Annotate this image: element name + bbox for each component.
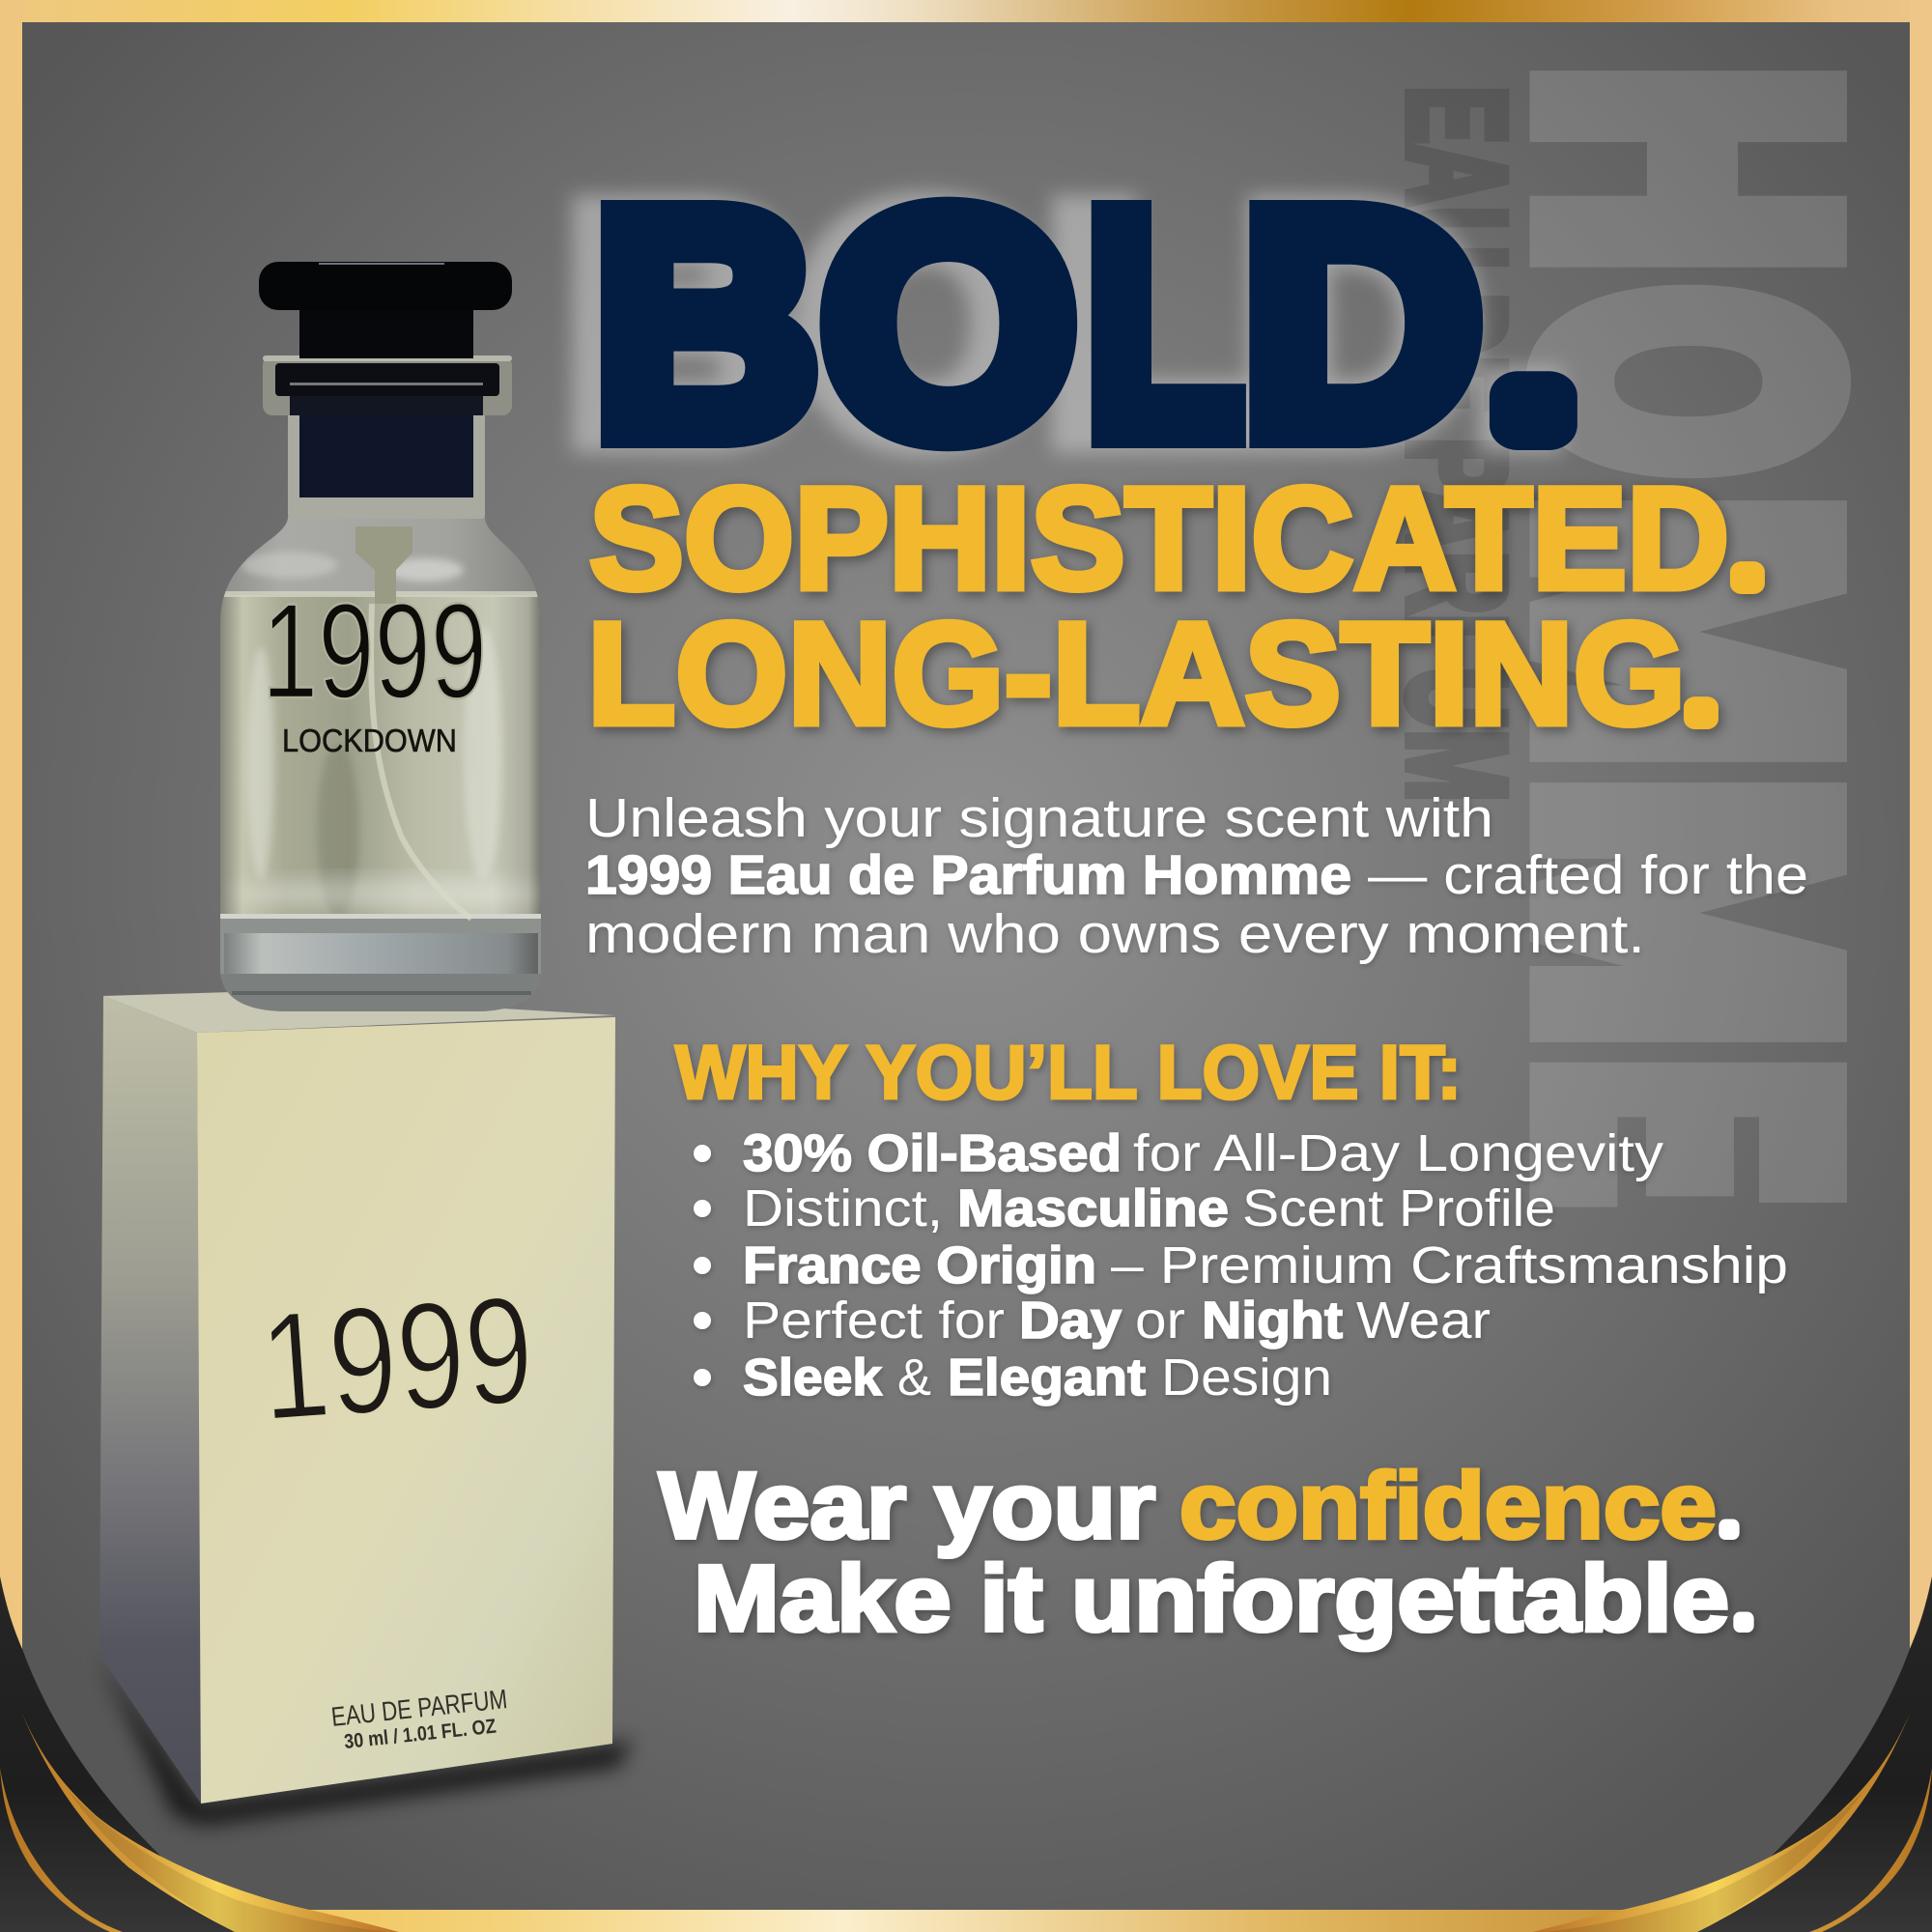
bullet 3: – Premium Craftsmanship	[1111, 1236, 1788, 1294]
bottom corner swoosh: right	[1533, 1577, 1932, 1932]
neck	[288, 411, 485, 519]
closing tagline: .	[1737, 1582, 1750, 1636]
bullet 5: Elegant	[948, 1349, 1146, 1406]
bullet 2: Masculine	[957, 1179, 1229, 1237]
bullet 5: Design	[1161, 1349, 1332, 1406]
heading glow: BOLD: BOLD.	[570, 145, 1565, 501]
box front face	[197, 1017, 615, 1804]
heading: LONG-LASTING: LONG-LASTING	[587, 592, 1686, 754]
heading: BOLD: .	[1503, 251, 1564, 467]
box label: eau de parfum: EAU DE PARFUM	[329, 1684, 509, 1732]
bullet 4: Night	[1202, 1292, 1343, 1350]
intro paragraph: Unleash your signature scent with	[585, 787, 1493, 849]
bullet 4	[694, 1292, 1491, 1350]
bottom corner swoosh: left	[0, 1577, 399, 1932]
bullet 1: for All-Day Longevity	[1133, 1124, 1663, 1182]
box side face	[99, 996, 201, 1804]
bullet 4: Day	[1019, 1292, 1122, 1350]
subheading: why you'll love it: WHY YOU’LL LOVE IT:	[675, 1029, 1462, 1115]
watermark: HOMME: O	[1466, 288, 1911, 475]
box top face	[103, 992, 615, 1033]
bullet 5: Sleek	[743, 1349, 883, 1406]
perfume bottle	[213, 262, 551, 1012]
bullet 4: or	[1135, 1292, 1185, 1350]
bottle logo: 1999	[262, 575, 487, 726]
intro paragraph	[585, 787, 1808, 965]
closing tagline: Wear your	[659, 1453, 1155, 1558]
heading: SOPHISTICATED: SOPHISTICATED	[589, 457, 1729, 619]
watermark: HOMME: E	[1466, 1060, 1911, 1204]
heading: BOLD: L	[1086, 145, 1242, 501]
bullet 5: &	[897, 1349, 931, 1406]
watermark: HOMME: H	[1466, 68, 1911, 270]
product box	[99, 992, 633, 1826]
bullet 2: Distinct,	[743, 1179, 943, 1237]
intro paragraph: — crafted for the	[1368, 844, 1808, 906]
closing tagline: .	[1722, 1490, 1736, 1544]
bottle body glass	[213, 512, 551, 1012]
bullet 1: 30% Oil-Based	[743, 1124, 1122, 1182]
bullet 1	[694, 1124, 1663, 1182]
box label: volume: 30 ml / 1.01 FL. OZ	[343, 1716, 497, 1753]
bottle label: LOCKDOWN	[282, 723, 457, 758]
intro paragraph: 1999 Eau de Parfum Homme	[585, 844, 1351, 906]
benefit list	[694, 1124, 1788, 1406]
bullet 3	[694, 1236, 1788, 1294]
watermark: HOMME: M	[1466, 497, 1911, 766]
heading: BOLD: B	[594, 145, 818, 501]
glass collar	[263, 355, 512, 415]
bullet 3: France Origin	[743, 1236, 1096, 1294]
closing tagline	[659, 1453, 1750, 1651]
watermark: EAU DE PARFUM: EAU DE PARFUM	[1379, 86, 1533, 802]
heading: BOLD: D	[1242, 145, 1482, 501]
intro paragraph: modern man who owns every moment.	[585, 903, 1645, 965]
heading: BOLD: O	[821, 145, 1076, 501]
closing tagline: confidence	[1179, 1453, 1717, 1558]
box logo: 1999	[255, 1264, 539, 1453]
bullet 2: Scent Profile	[1242, 1179, 1555, 1237]
bullet 4: Perfect for	[743, 1292, 1005, 1350]
bullet 4: Wear	[1356, 1292, 1491, 1350]
bullet 2	[694, 1179, 1555, 1237]
closing tagline: Make it unforgettable	[694, 1546, 1729, 1651]
watermark: HOMME: M	[1466, 779, 1911, 1046]
heading: LONG-LASTING: .	[1690, 649, 1713, 735]
cap	[259, 262, 512, 358]
heading: SOPHISTICATED: .	[1736, 514, 1759, 600]
pump and dip tube	[355, 526, 471, 919]
bullet 5	[694, 1349, 1332, 1406]
